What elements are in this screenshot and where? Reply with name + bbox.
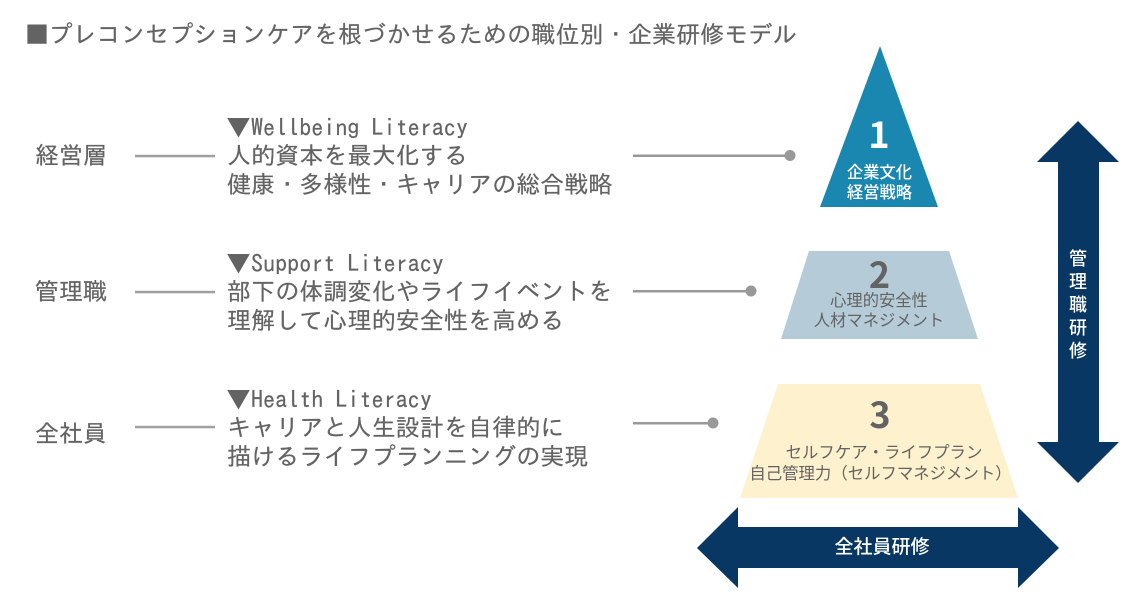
text block: Health Literacy: Health Literacy <box>251 387 432 411</box>
arrow label: 管理職研修: 修 <box>1069 337 1087 363</box>
connector: label to text <box>135 291 215 293</box>
arrow label: 管理職研修: 管 <box>1069 245 1087 271</box>
arrow label: 全社員研修: 全社員研修 <box>834 532 930 559</box>
title: ■ <box>25 15 49 50</box>
level 1 label: 経営戦略 <box>847 179 913 203</box>
text block: Support Literacy: Support Literacy <box>251 251 444 275</box>
label: 全社員: 全社員 <box>35 421 107 445</box>
connector with dot to level 2 <box>633 286 756 296</box>
text block: Wellbeing Literacy: 人的資本を最大化する <box>227 143 468 167</box>
pyramid level 3 <box>740 384 1018 498</box>
level 3 label <box>749 444 1012 483</box>
text block: Wellbeing Literacy: ▼ <box>226 108 250 143</box>
row: 管理職 <box>35 244 756 332</box>
connector with dot to level 3 <box>633 418 718 428</box>
pyramid level 1 <box>820 46 938 207</box>
title <box>25 15 797 50</box>
arrow label: 管理職研修: 職 <box>1069 291 1087 317</box>
level 1 label: 企業文化 <box>847 159 912 183</box>
arrow: 全社員研修 horizontal <box>697 507 1059 588</box>
number 3: 3 <box>869 387 891 439</box>
text block: Wellbeing Literacy: 健康・多様性・キャリアの総合戦略 <box>227 172 613 196</box>
text block: Health Literacy: ▼ <box>226 380 250 415</box>
row: 経営層 <box>35 108 796 196</box>
title: プレコンセプションケアを根づかせるための職位別・企業研修モデル <box>48 22 797 46</box>
connector with dot to level 1 <box>633 150 796 161</box>
arrow label: 管理職研修 <box>1069 245 1087 363</box>
connector: label to text <box>135 155 215 157</box>
number 1: 1 <box>868 107 890 159</box>
row: 全社員 <box>35 380 718 468</box>
number 2: 2 <box>869 247 890 299</box>
text block: Support Literacy <box>226 244 613 332</box>
text block: Health Literacy: キャリアと人生設計を自律的に <box>227 415 564 439</box>
arrow: 管理職研修 vertical <box>1037 121 1119 483</box>
pyramid level 2 <box>781 247 978 339</box>
text block: Health Literacy: 描けるライフプランニングの実現 <box>227 444 588 468</box>
level 1 label <box>847 159 913 203</box>
level 2 label: 心理的安全性 <box>830 292 928 310</box>
arrow label: 管理職研修: 理 <box>1069 268 1087 294</box>
level 3 label: 自己管理力（セルフマネジメント） <box>749 465 1012 483</box>
label: 経営層: 経営層 <box>35 143 107 167</box>
text block: Wellbeing Literacy <box>226 108 613 196</box>
level 2 label: 人材マネジメント <box>814 312 944 330</box>
connector: label to text <box>135 426 215 428</box>
label: 管理職: 管理職 <box>35 279 107 303</box>
arrow label: 管理職研修: 研 <box>1069 314 1087 340</box>
text block: Health Literacy <box>226 380 588 468</box>
text block: Support Literacy: 部下の体調変化やライフイベントを <box>227 279 613 303</box>
text block: Wellbeing Literacy: Wellbeing Literacy <box>251 115 468 139</box>
level 3 label: セルフケア・ライフプラン <box>786 444 982 462</box>
level 2 label <box>814 292 944 330</box>
text block: Support Literacy: ▼ <box>226 244 250 279</box>
text block: Support Literacy: 理解して心理的安全性を高める <box>227 308 564 332</box>
